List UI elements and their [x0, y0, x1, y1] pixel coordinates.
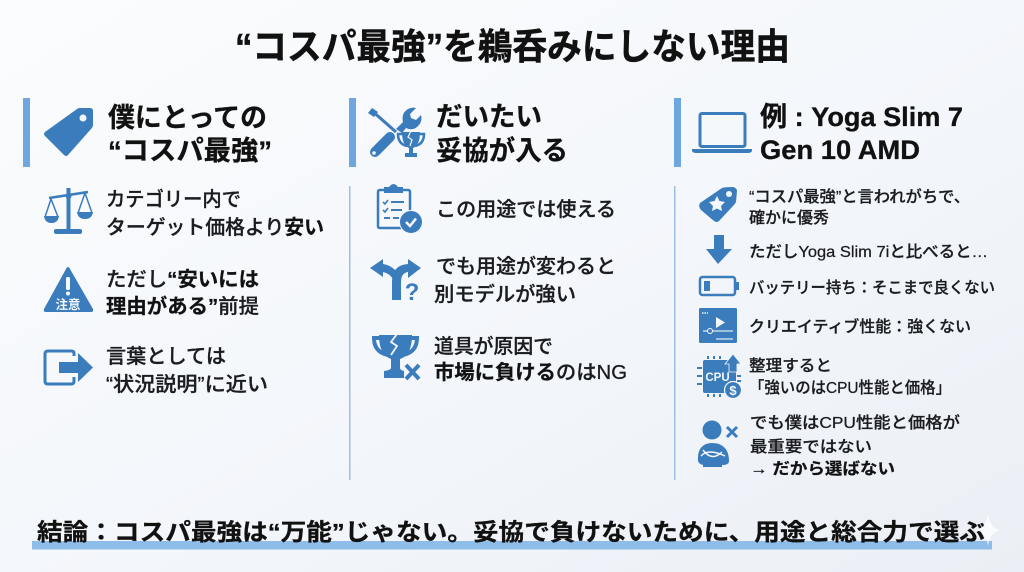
icon: down arrow	[706, 235, 732, 264]
text: NG to lose	[434, 335, 627, 384]
heading: 僕にとっての	[108, 103, 267, 133]
icon: exit arrow	[45, 351, 93, 384]
icon: forked arrows: ?	[405, 279, 419, 306]
column accent bar	[23, 98, 30, 167]
heading	[108, 103, 272, 166]
heading: “コスパ最強”	[108, 136, 272, 166]
conclusion banner	[32, 514, 1000, 550]
heading: 妥協が入る	[436, 135, 568, 166]
column divider	[349, 186, 350, 480]
icon: CPU with arrow and dollar: $	[729, 383, 737, 398]
icon: sparkle	[976, 514, 1000, 546]
text: situation description	[106, 345, 268, 396]
icon: low battery	[700, 277, 739, 295]
text: not chosen	[750, 413, 960, 478]
panel: what best value means to me	[23, 98, 324, 396]
icon: star tag	[699, 187, 737, 222]
text: seen as best value: 確かに優秀	[749, 209, 829, 227]
text: category price	[106, 187, 324, 239]
icon: laptop	[692, 114, 752, 153]
text: category price: カテゴリー内で	[106, 187, 241, 211]
text: cheap has a reason: 理由がある”前提	[106, 294, 259, 318]
text: creative performance: クリエイティブ性能：強くない	[749, 317, 971, 336]
conclusion text: 結論：コスパ最強は“万能”じゃない。妥協で負けないために、用途と総合力で選ぶ	[37, 519, 986, 545]
icon: balance scale	[44, 188, 93, 234]
icon: checklist	[378, 184, 422, 234]
text: NG to lose: 市場に負けるのはNG	[434, 361, 627, 384]
icon: caution triangle: 注意	[55, 297, 81, 312]
panel: Yoga Slim 7 example	[674, 98, 995, 480]
icon: CPU with arrow and dollar: CPU	[705, 372, 730, 384]
column accent bar	[349, 98, 356, 167]
heading	[760, 102, 963, 165]
icon: tools and trophy	[368, 108, 424, 157]
heading: Gen 10 AMD	[760, 135, 920, 165]
title: “コスパ最強”を鵜呑みにしない理由	[235, 26, 790, 67]
text: summary: 「強いのはCPU性能と価格」	[749, 379, 951, 397]
text: situation description: 言葉としては	[106, 345, 226, 368]
icon: video player	[699, 308, 737, 343]
heading: 例 : Yoga Slim 7	[760, 102, 963, 132]
text: other model stronger: でも用途が変わると	[436, 255, 616, 278]
text: other model stronger	[434, 255, 616, 306]
icon: price tag	[44, 108, 93, 156]
text: summary: 整理すると	[749, 357, 832, 375]
text: cheap has a reason	[106, 268, 259, 318]
text: summary	[749, 357, 951, 397]
text: not chosen: 最重要ではない	[750, 438, 872, 456]
panel: compromises	[349, 98, 627, 480]
icon: forked arrows	[370, 259, 421, 306]
text: other model stronger: 別モデルが強い	[434, 282, 576, 306]
column divider	[674, 186, 676, 480]
highlight bar	[32, 541, 992, 550]
text: cheap has a reason: ただし“安いには	[106, 268, 259, 291]
icon: person with crossed arms	[698, 420, 737, 467]
text: not chosen: でも僕はCPU性能と価格が	[750, 413, 960, 432]
heading	[436, 102, 568, 166]
text: not chosen: → だから選ばない	[750, 460, 895, 478]
text: situation description: “状況説明”に近い	[106, 373, 268, 396]
icon: broken trophy with cross	[374, 334, 419, 379]
text: seen as best value	[749, 187, 970, 227]
text: usable for this purpose: この用途では使える	[436, 198, 616, 221]
column accent bar	[674, 98, 681, 167]
icon: caution triangle	[44, 267, 93, 312]
heading: だいたい	[436, 102, 542, 132]
icon: CPU with arrow and dollar	[697, 354, 742, 398]
text: battery: バッテリー持ち：そこまで良くない	[749, 279, 995, 297]
text: category price: ターゲット価格より安い	[106, 216, 324, 239]
text: NG to lose: 道具が原因で	[434, 335, 553, 358]
text: seen as best value: “コスパ最強”と言われがちで、	[749, 187, 970, 206]
text: comparison: ただしYoga Slim 7iと比べると…	[749, 243, 988, 261]
